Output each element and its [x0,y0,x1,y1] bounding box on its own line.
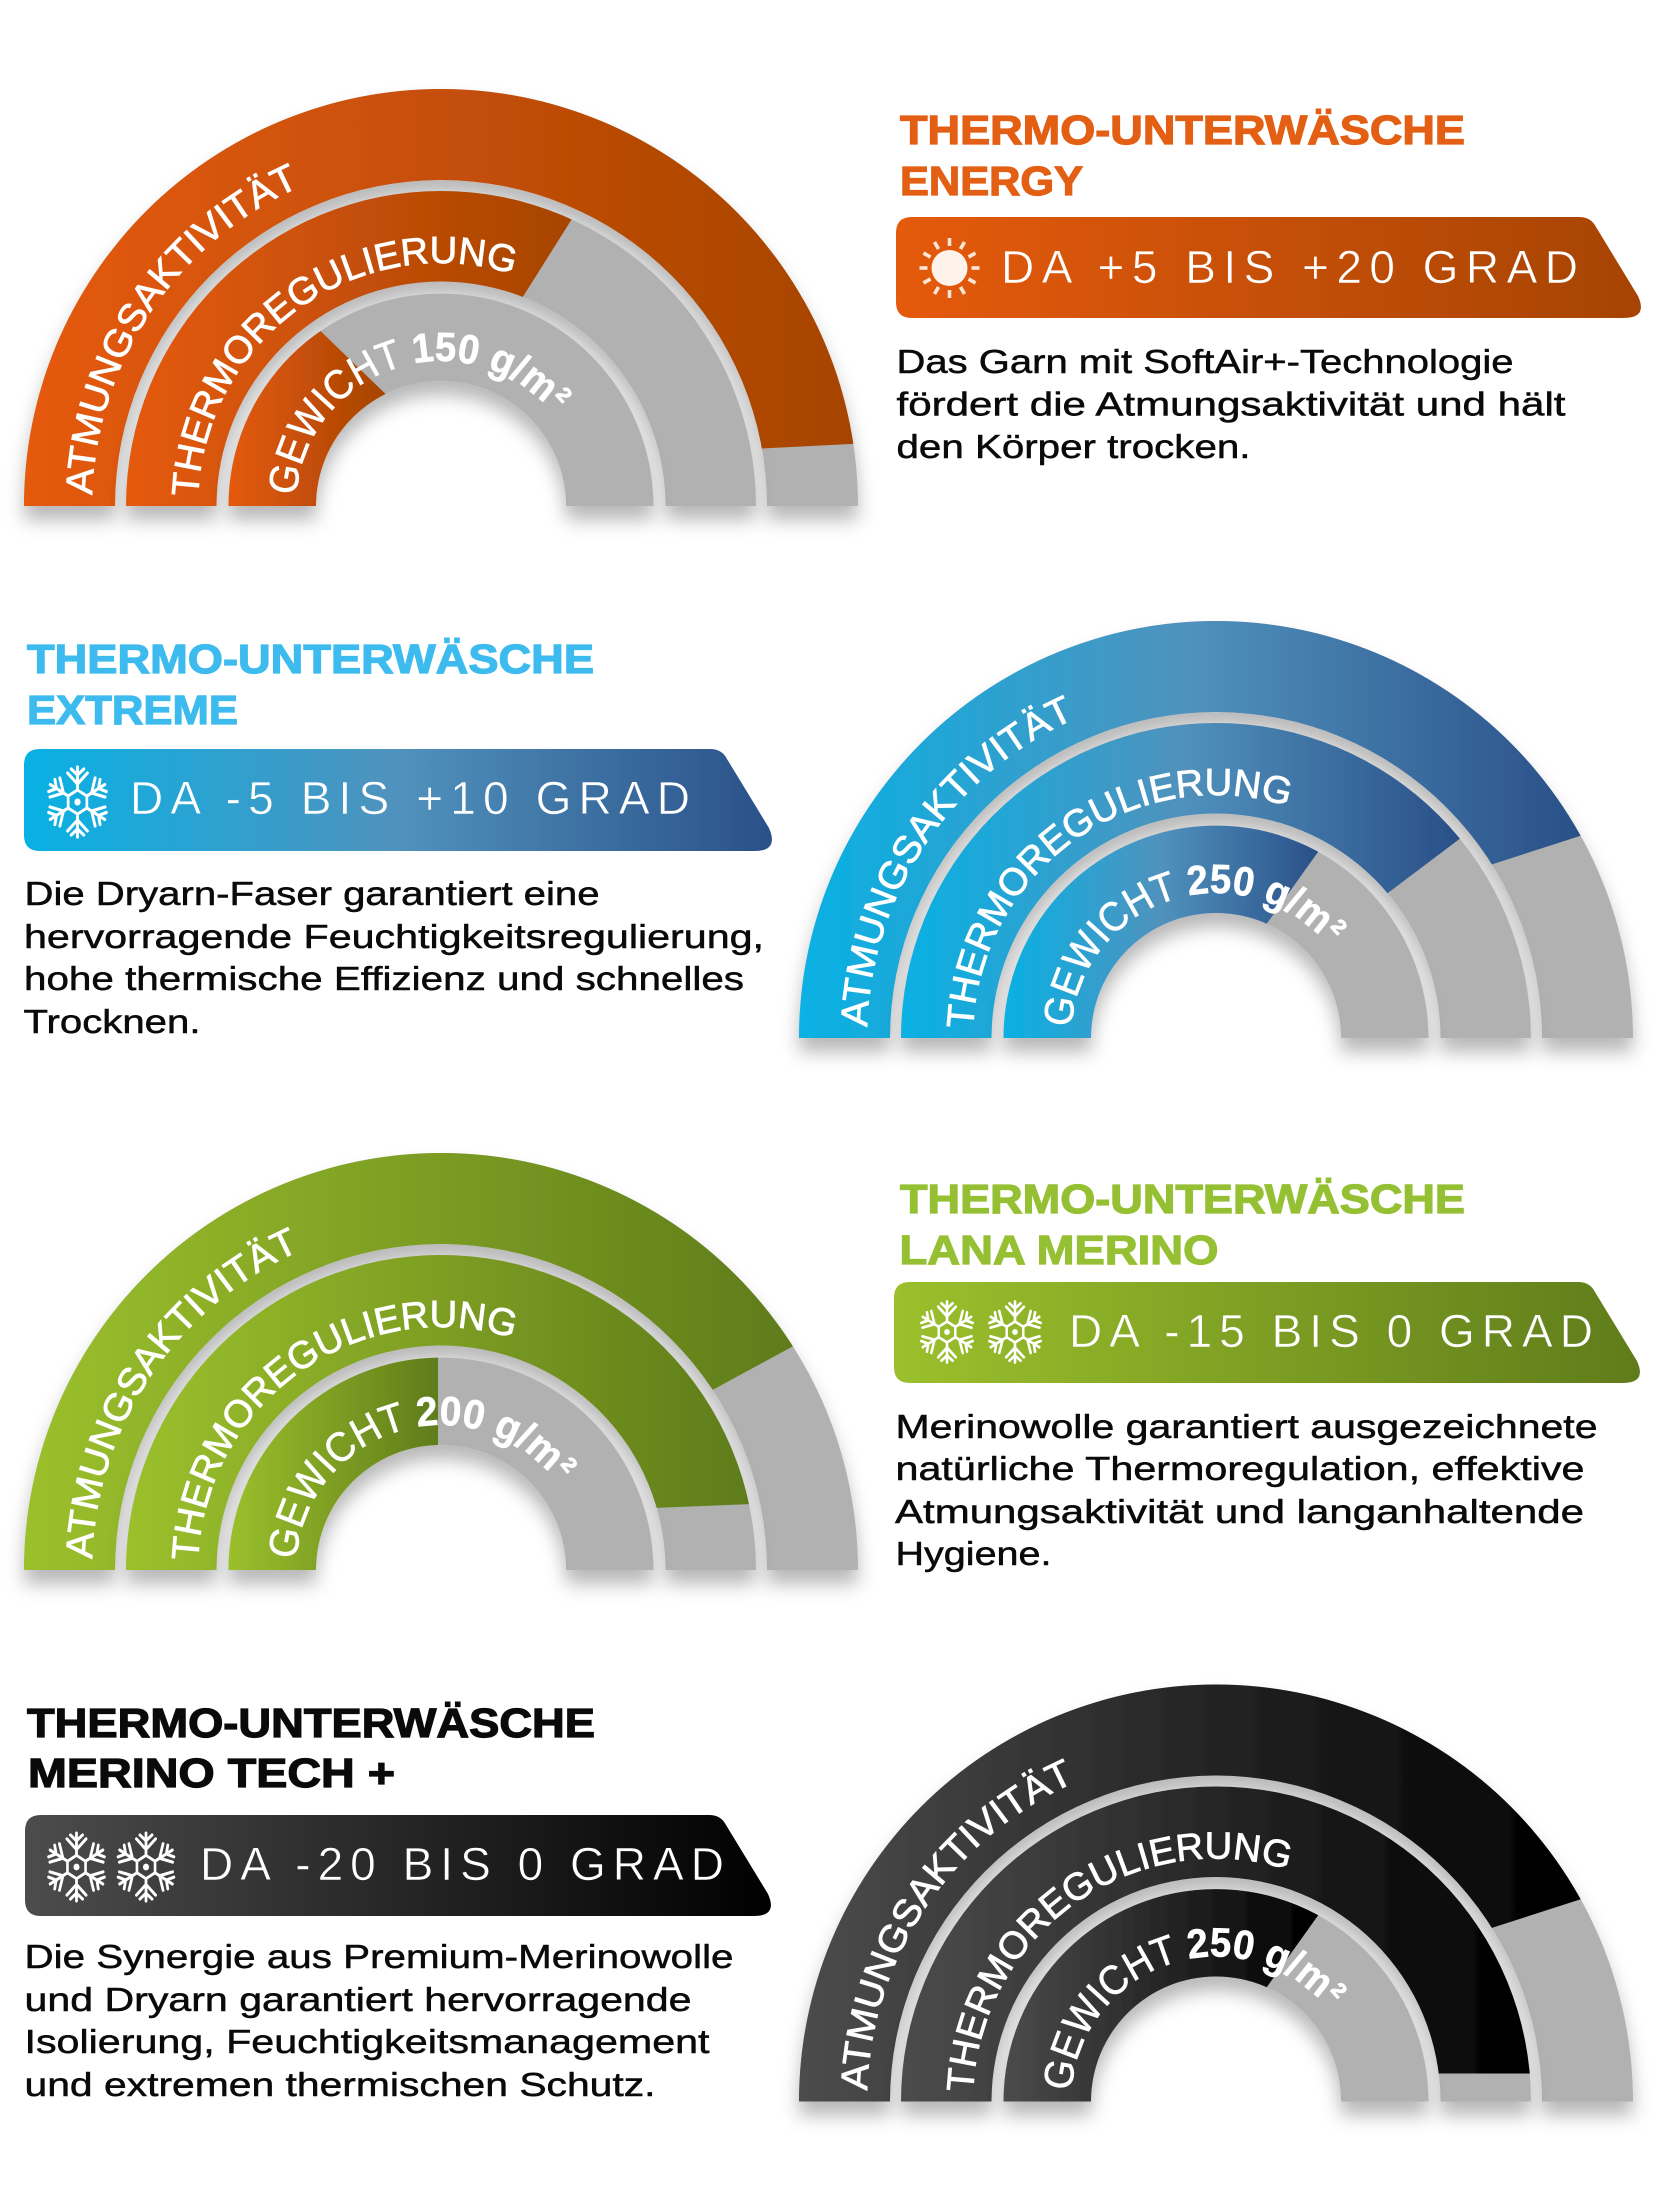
body text: Extreme: hervorragende Feuchtigkeitsregulierung, [24,918,764,955]
heading: Energy: ENERGY [900,158,1083,204]
label: Thermoregulierung: THERMOREGULIERUNG [946,1832,1290,2090]
label: Atmungsaktivität: ATMUNGSAKTIVITÄT [841,694,1066,1028]
body text: Merino Tech: Die Synergie aus Premium-Merinowolle [24,1938,734,1975]
label: Atmungsaktivität: ATMUNGSAKTIVITÄT [841,1758,1066,2092]
panel: Merino Tech text block [24,1700,771,2103]
body text: Merino Tech [24,1938,734,2103]
heading: Extreme: THERMO-UNTERWÄSCHE [27,636,594,682]
body text: Lana Merino: Atmungsaktivität und langanhaltende [895,1493,1584,1530]
body text: Lana Merino [895,1408,1598,1572]
label: Gewicht 250: GEWICHT 250 g/m² [1044,864,1347,1024]
ring: Thermoregulierung blue [901,723,1531,1038]
badge: temperature range Lana Merino [894,1282,1640,1383]
label: Thermoregulierung: THERMOREGULIERUNG [171,1300,516,1559]
heading: Merino Tech: MERINO TECH + [28,1750,395,1796]
ring: Atmungsaktivität orange [24,89,858,506]
body text: Merino Tech: und extremen thermischen Schutz. [24,2066,656,2103]
badge: temperature range extreme [24,749,772,851]
icon: snowflake [45,767,110,837]
body text: Energy: den Körper trocken. [896,428,1250,465]
badge: temperature range energy [896,217,1641,318]
body text: Extreme: hohe thermische Effizienz und schnelles [24,960,744,997]
heading: Lana Merino: LANA MERINO [900,1227,1218,1273]
panel: Energy gauge chart [14,89,868,530]
ring: Gewicht black [1004,1889,1428,2102]
panel: Energy text block [896,107,1641,465]
badge label: DA -5 BIS +10 GRAD [130,772,690,824]
badge: temperature range Merino Tech [25,1815,771,1916]
panel: Merino Tech gauge chart [789,1684,1643,2126]
body text: Lana Merino: Merinowolle garantiert ausgezeichnete [896,1408,1598,1445]
body text: Lana Merino: Hygiene. [896,1535,1052,1572]
heading: Energy: THERMO-UNTERWÄSCHE [900,107,1465,153]
body text: Extreme: Die Dryarn-Faser garantiert eine [24,875,600,912]
label: Thermoregulierung: THERMOREGULIERUNG [171,236,516,495]
heading: Extreme [27,636,594,733]
body text: Merino Tech: und Dryarn garantiert hervorragende [24,1981,691,2018]
body text: Merino Tech: Isolierung, Feuchtigkeitsmanagement [24,2023,710,2060]
heading: Lana Merino: THERMO-UNTERWÄSCHE [900,1176,1465,1222]
heading: Lana Merino [900,1176,1465,1273]
label: Thermoregulierung: THERMOREGULIERUNG [946,768,1290,1027]
ring: Thermoregulierung green [126,1255,756,1570]
body text: Energy [896,343,1566,465]
panel: Lana Merino gauge chart [14,1153,868,1594]
ring: Atmungsaktivität black [799,1684,1633,2102]
icon: sun [920,238,980,298]
panel: Lana Merino text block [894,1176,1640,1572]
body text: Lana Merino: natürliche Thermoregulation, effektive [896,1450,1584,1487]
panel: Extreme text block [24,636,772,1040]
icon: two snowflakes white [45,1833,177,1901]
heading: Merino Tech [27,1700,595,1796]
icon: two snowflakes [918,1302,1044,1362]
badge label: DA +5 BIS +20 GRAD [1001,241,1578,293]
body text: Extreme [24,875,764,1040]
body text: Energy: Das Garn mit SoftAir+-Technologie [896,343,1514,380]
ring: Thermoregulierung black [901,1786,1531,2102]
heading: Extreme: EXTREME [27,687,238,733]
ring: Gewicht blue [1004,826,1428,1038]
ring: Atmungsaktivität green [24,1153,858,1570]
label: Gewicht 200: GEWICHT 200 g/m² [270,1396,577,1556]
badge label: DA -15 BIS 0 GRAD [1069,1305,1593,1357]
heading: Merino Tech: THERMO-UNTERWÄSCHE [27,1700,595,1746]
body text: Energy: fördert die Atmungsaktivität und hält [896,386,1566,422]
label: Gewicht 150: GEWICHT 150 g/m² [269,332,572,492]
ring: Gewicht green [228,1358,654,1570]
ring: Gewicht orange [228,294,654,506]
panel: Extreme gauge chart [789,621,1643,1062]
body text: Extreme: Trocknen. [24,1003,200,1040]
heading: Energy [900,107,1465,204]
badge label: DA -20 BIS 0 GRAD [200,1838,724,1890]
label: Atmungsaktivität: ATMUNGSAKTIVITÄT [66,1226,292,1560]
label: Atmungsaktivität: ATMUNGSAKTIVITÄT [66,162,292,496]
ring: Thermoregulierung orange [126,191,756,506]
ring: Atmungsaktivität blue [799,621,1633,1038]
label: Gewicht 250: GEWICHT 250 g/m² [1044,1928,1347,2088]
